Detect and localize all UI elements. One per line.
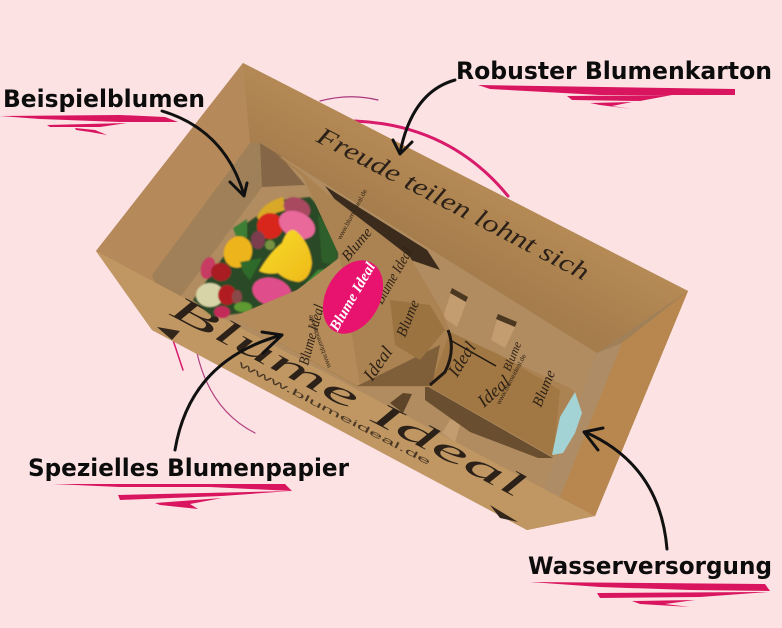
paper print: Blume [339, 225, 376, 265]
callout: Beispielblumen [0, 85, 247, 196]
heading: Robuster Blumenkarton [456, 57, 772, 85]
heading: Spezielles Blumenpapier [28, 454, 349, 482]
brand lettering on front wall: Blume Ideal [164, 288, 531, 505]
arrow [393, 80, 455, 154]
paper print: www.blumeideal.de [336, 188, 369, 242]
slogan on back wall: Freude teilen lohnt sich [311, 122, 593, 286]
box floor [178, 143, 597, 495]
left wall [96, 63, 250, 290]
kraft paper wrap [233, 153, 575, 457]
right floor flap [543, 343, 622, 499]
arrow [175, 332, 282, 450]
arrow [584, 428, 667, 549]
paper print: Blume [394, 298, 423, 339]
paper print: Blume Ideal [296, 303, 328, 367]
callout: Spezielles Blumenpapier [28, 332, 349, 509]
heading: Wasserversorgung [528, 552, 772, 580]
paper twist tie [430, 330, 451, 385]
floor insert slots [390, 288, 517, 442]
paper print: Blume [500, 339, 525, 373]
underline [0, 115, 178, 135]
callout: Wasserversorgung [528, 428, 772, 607]
callout: Robuster Blumenkarton [393, 57, 772, 154]
right wall [560, 291, 688, 516]
water supply pouch [552, 392, 582, 455]
paper print: Ideal [358, 343, 396, 385]
arrow [162, 111, 247, 196]
paper print: Blume Ideal [372, 245, 416, 307]
decorative pink swashes behind box [173, 97, 508, 433]
paper print [296, 188, 559, 412]
pink sticker [311, 250, 395, 344]
floor shadow beside paper [325, 186, 440, 270]
web address on front wall: www.blumeideal.de [235, 358, 432, 467]
box silhouette base [96, 63, 688, 530]
paper print: Blume [530, 368, 559, 409]
floor shadow below sleeve [425, 385, 553, 458]
brand swash ends [157, 327, 180, 340]
back corner shadow [260, 142, 305, 187]
left floor flap [152, 142, 262, 300]
pink sticker: Blume Ideal [327, 259, 379, 335]
cardboard box [96, 63, 688, 530]
back wall [243, 63, 688, 353]
paper print: www.blumeideal.de [495, 353, 528, 407]
heading: Beispielblumen [3, 85, 205, 113]
front wall [96, 251, 595, 530]
flower bouquet [193, 193, 340, 318]
paper print: www.blumeideal.de [307, 313, 333, 370]
paper print: Ideal [443, 338, 480, 381]
paper print: Ideal [473, 371, 514, 412]
